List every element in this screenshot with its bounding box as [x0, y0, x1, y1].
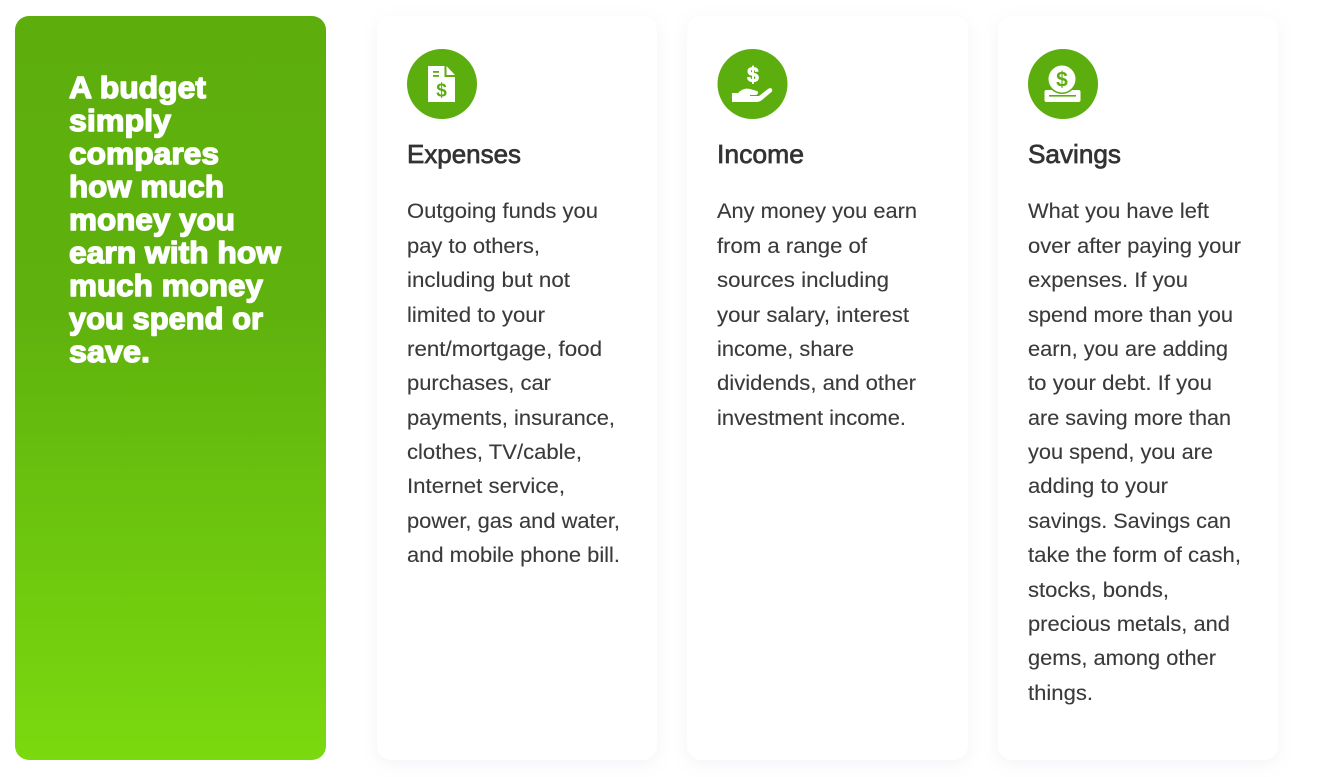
text: savings description: What you have left: [1028, 200, 1209, 223]
text: expenses description: limited to your: [407, 304, 545, 327]
text: expenses description: [407, 200, 620, 567]
text: income description: from a range of: [717, 235, 867, 258]
heading: expenses: Expenses: [407, 139, 521, 169]
heading: budget definition statement: money you: [69, 202, 235, 237]
text: savings description: are saving more than: [1028, 407, 1231, 430]
text: expenses description: payments, insurance,: [407, 407, 615, 430]
heading: budget definition statement: compares: [69, 136, 219, 171]
text: income description: your salary, interest: [717, 304, 909, 327]
text: savings description: take the form of cash,: [1028, 544, 1241, 567]
icon: hand receiving dollar: $: [747, 64, 759, 87]
heading: budget definition statement: you spend or: [69, 301, 263, 336]
text: savings description: stocks, bonds,: [1028, 579, 1169, 602]
text: expenses description: pay to others,: [407, 235, 540, 258]
panel: expenses: [377, 16, 657, 760]
icon: coin dropping into tray: [1028, 49, 1098, 119]
panel: income: [687, 16, 968, 760]
panel: budget definition: [15, 16, 326, 760]
text: expenses description: and mobile phone bill.: [407, 544, 620, 567]
heading: budget definition statement: A budget: [69, 70, 206, 105]
text: savings description: expenses. If you: [1028, 269, 1188, 292]
text: savings description: spend more than you: [1028, 304, 1233, 327]
text: savings description: precious metals, and: [1028, 613, 1230, 636]
heading: budget definition statement: save.: [69, 334, 150, 369]
text: income description: [717, 200, 917, 430]
text: expenses description: including but not: [407, 269, 570, 292]
text: savings description: over after paying your: [1028, 235, 1241, 258]
heading: budget definition statement: earn with how: [69, 235, 282, 270]
text: income description: income, share: [717, 338, 854, 361]
text: income description: investment income.: [717, 407, 906, 430]
text: savings description: gems, among other: [1028, 647, 1216, 670]
text: income description: sources including: [717, 269, 889, 292]
icon: expense document with dollar sign: [407, 49, 477, 119]
heading: budget definition statement: [69, 70, 282, 369]
text: savings description: to your debt. If you: [1028, 372, 1212, 395]
text: income description: Any money you earn: [717, 200, 917, 223]
heading: income: Income: [717, 139, 804, 169]
text: savings description: savings. Savings can: [1028, 510, 1231, 533]
text: savings description: things.: [1028, 682, 1093, 705]
icon: expense document with dollar sign: $: [436, 80, 447, 102]
icon: coin dropping into tray: $: [1056, 68, 1068, 92]
heading: budget definition statement: simply: [69, 103, 172, 138]
text: expenses description: power, gas and water,: [407, 510, 620, 533]
heading: savings: Savings: [1028, 139, 1121, 169]
panel: savings: [998, 16, 1278, 760]
heading: budget definition statement: much money: [69, 268, 264, 303]
text: savings description: adding to your: [1028, 475, 1168, 498]
text: income description: dividends, and other: [717, 372, 916, 395]
text: expenses description: purchases, car: [407, 372, 551, 395]
icon: hand receiving dollar: [718, 49, 788, 119]
heading: budget definition statement: how much: [69, 169, 224, 204]
text: savings description: [1028, 200, 1241, 705]
text: expenses description: rent/mortgage, food: [407, 338, 602, 361]
text: savings description: you spend, you are: [1028, 441, 1213, 464]
text: savings description: earn, you are adding: [1028, 338, 1228, 361]
text: expenses description: Internet service,: [407, 475, 565, 498]
text: expenses description: Outgoing funds you: [407, 200, 598, 223]
text: expenses description: clothes, TV/cable,: [407, 441, 582, 464]
